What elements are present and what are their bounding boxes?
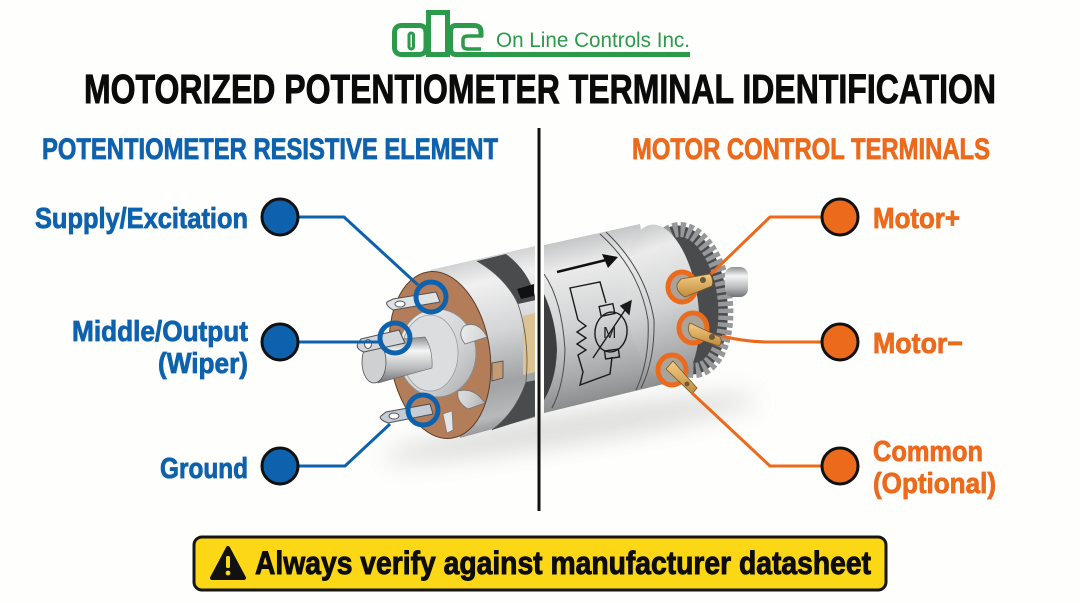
center divider: [538, 128, 540, 511]
label: middle/output wiper: [72, 316, 298, 380]
label: motor plus: Motor+: [873, 203, 960, 235]
motor schematic symbol: [570, 282, 631, 385]
leader lines: blue: [298, 217, 418, 466]
leader lines: orange: [692, 217, 822, 466]
label: common optional: [822, 436, 996, 500]
terminal: wiper: [357, 330, 405, 352]
label: common optional: (Optional): [873, 468, 996, 500]
brass terminal: motor minus: [688, 323, 721, 346]
logo: On Line Controls Inc.: [394, 12, 690, 57]
terminal: supply: [387, 292, 440, 310]
label: middle/output wiper: (Wiper): [158, 348, 248, 380]
tan notch: [523, 313, 535, 375]
black notch: [517, 284, 534, 299]
brass terminal: motor plus: [677, 274, 713, 297]
output shaft: [725, 267, 748, 297]
inner silver plate: [398, 309, 476, 397]
brown contact tab: [492, 361, 503, 381]
brown resistive face: [389, 271, 492, 439]
motor: potentiometer end: [357, 245, 540, 445]
terminal: ground: [380, 404, 433, 423]
gear: [663, 222, 734, 378]
warning text: Always verify against manufacturer datasheet: [255, 545, 871, 581]
dark collar band: [477, 254, 536, 430]
plate tabs: [458, 324, 487, 409]
logo: On Line Controls Inc.: On Line Controls Inc.: [496, 29, 690, 52]
warning banner: [194, 537, 886, 590]
rivet: [443, 411, 453, 433]
motor body left: [430, 245, 540, 438]
heading: potentiometer resistive element: POTENTIOMETER RESISTIVE ELEMENT: [42, 133, 498, 166]
motor: drive end: [540, 220, 748, 414]
label: motor minus: Motor−: [873, 328, 963, 360]
brass terminal: common: [666, 361, 697, 394]
label: common optional: Common: [873, 436, 983, 468]
terminal rings: blue: [380, 282, 446, 425]
motor shadow: [380, 382, 760, 474]
dark recess: [544, 294, 557, 400]
terminal rings: orange: [658, 272, 707, 385]
direction arrow: [557, 254, 618, 272]
label: motor plus: [822, 199, 960, 235]
icon: warning triangle: [212, 548, 244, 578]
body seam lines: [544, 232, 654, 408]
motor shaft: [362, 337, 432, 383]
motor body right: [544, 224, 699, 413]
label: middle/output wiper: Middle/Output: [72, 316, 248, 348]
label: supply/excitation: Supply/Excitation: [35, 203, 248, 235]
motor letter M: M: [603, 325, 616, 342]
silver end cap edge: [477, 261, 527, 430]
label: motor minus: [822, 324, 963, 360]
label: ground: Ground: [160, 453, 248, 485]
label: ground: [160, 448, 298, 485]
heading: motor control terminals: MOTOR CONTROL TERMINALS: [632, 133, 990, 166]
